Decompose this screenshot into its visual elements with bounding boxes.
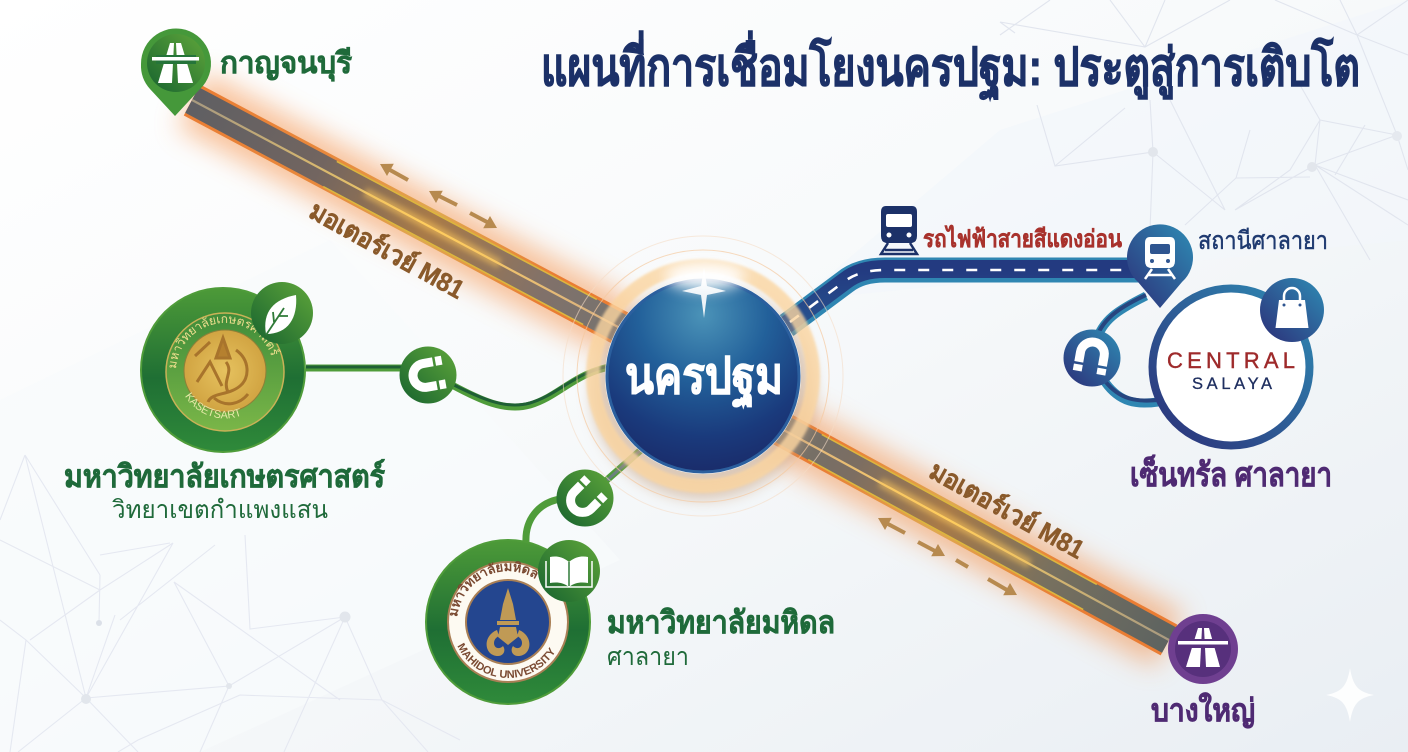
logo: Central: CENTRAL (1167, 348, 1295, 373)
road arrows lower (878, 518, 1017, 595)
label: motorway lower: มอเตอร์เวย์ M81 (925, 455, 1089, 565)
icon: magnet Central (1064, 330, 1120, 386)
hub: Nakhon Pathom (563, 236, 843, 516)
emblem: naga (195, 338, 248, 404)
seal lettering: มหาวิทยาลัยเกษตรศาสตร์ (170, 316, 282, 368)
label: Kasetsart: มหาวิทยาลัยเกษตรศาสตร์ (64, 459, 385, 494)
icon: book (538, 540, 600, 602)
icon: magnet Mahidol (556, 470, 614, 526)
label: Central Salaya: เซ็นทรัล ศาลายา (1130, 454, 1332, 493)
label: Mahidol: มหาวิทยาลัยมหิดล (607, 605, 835, 640)
label: Mahidol: ศาลายา (607, 643, 689, 671)
network pattern: upper right (1000, 0, 1408, 260)
rail line (786, 269, 1150, 326)
label: Kanchanaburi: กาญจนบุรี (220, 47, 352, 82)
icon: train (881, 206, 917, 254)
seal lettering: มหาวิทยาลัยมหิดล (450, 561, 538, 616)
pin: Bang Yai (1168, 614, 1238, 684)
Kasetsart seal (140, 287, 306, 453)
label: Kasetsart (64, 459, 385, 524)
seal name: MAHIDOL UNIVERSITY (458, 642, 554, 678)
connector: Mahidol (526, 449, 642, 542)
logo: Salaya: SALAYA (1192, 375, 1272, 393)
road arrows upper (380, 164, 497, 228)
label: Salaya station: สถานีศาลายา (1198, 227, 1328, 255)
label: Mahidol (607, 605, 835, 671)
icon: leaf (251, 282, 313, 344)
pin: Salaya station (1127, 224, 1193, 308)
label: hub: นครปฐม (625, 348, 783, 408)
seal name: KASETSART (185, 392, 240, 418)
label: motorway upper: มอเตอร์เวย์ M81 (305, 195, 469, 305)
connector: station to Central (1095, 295, 1158, 403)
icon: magnet Kasetsart (400, 346, 456, 404)
pin: Kanchanaburi (141, 29, 211, 116)
network pattern: lower left (0, 455, 460, 752)
emblem: crown (487, 588, 529, 656)
icon: shopping bag (1260, 278, 1324, 342)
motorway M81 road (192, 100, 1169, 640)
label: Kasetsart: วิทยาเขตกำแพงแสน (112, 496, 328, 524)
connector: Kasetsart (306, 365, 615, 407)
label: rail line: รถไฟฟ้าสายสีแดงอ่อน (923, 224, 1123, 253)
label: Bang Yai: บางใหญ่ (1151, 692, 1255, 729)
Mahidol seal (425, 539, 591, 705)
sparkle (1326, 668, 1374, 722)
Central Salaya circle (1152, 288, 1310, 446)
